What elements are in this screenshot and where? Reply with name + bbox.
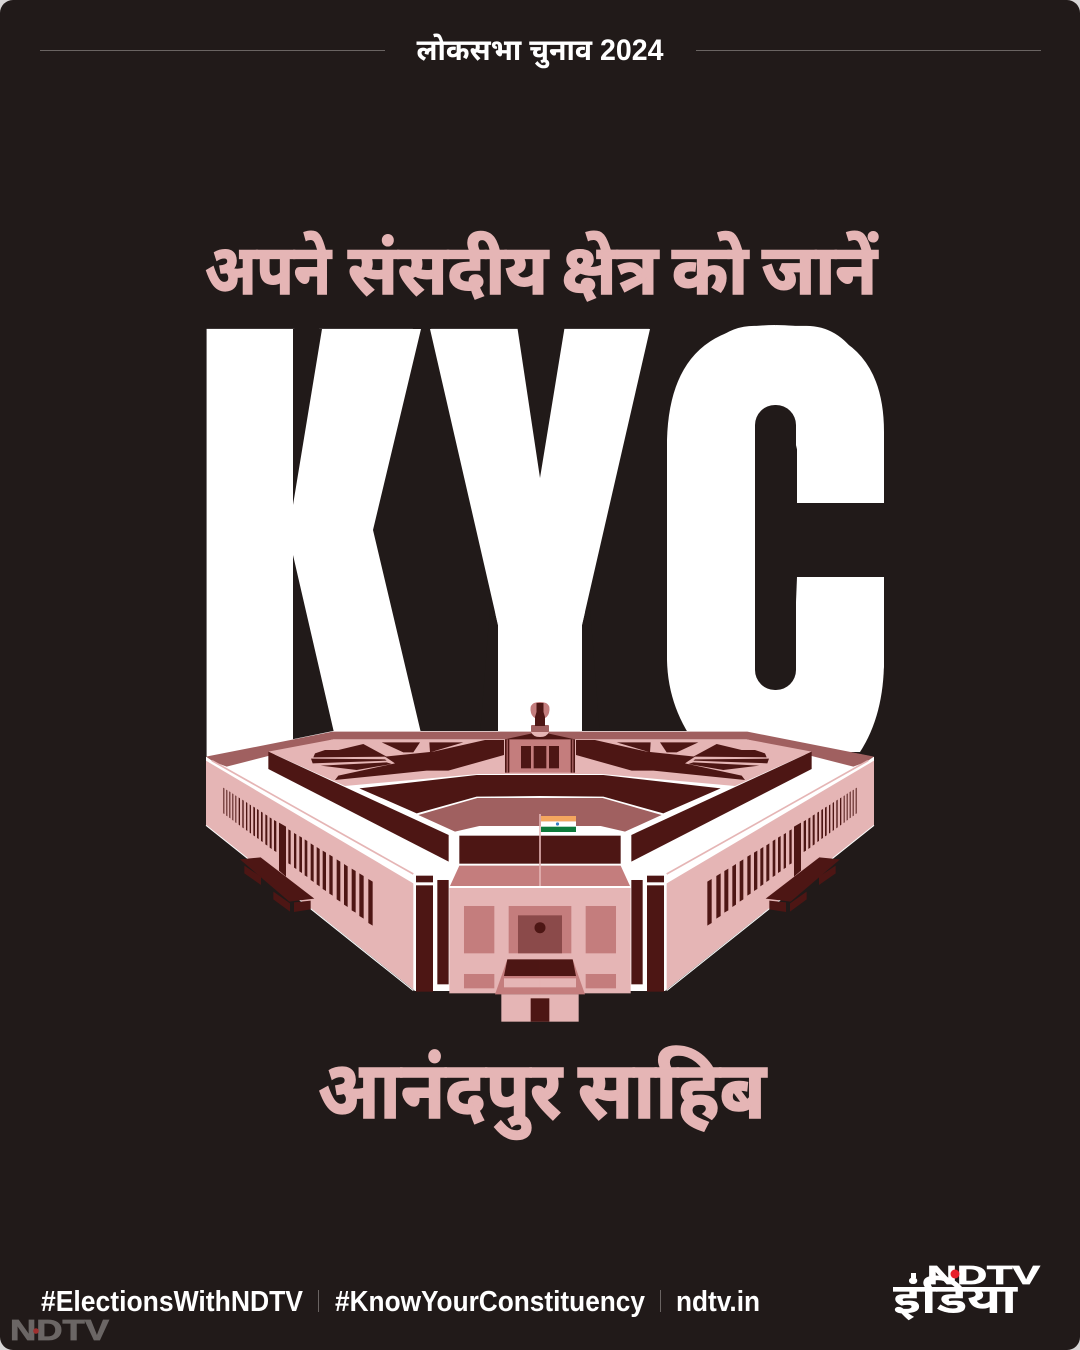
heading: know your constituency: अपने [205, 230, 333, 309]
building base terrace [206, 731, 874, 991]
side wall [206, 761, 413, 989]
footer hashtags: #KnowYourConstituency [335, 1286, 645, 1318]
logo: NDTV India: इंडिया [893, 1275, 1018, 1322]
flag pole [539, 814, 541, 886]
porch [501, 994, 540, 1022]
facade [449, 888, 540, 993]
rear block half [505, 739, 540, 773]
icon: indian flag [541, 816, 576, 832]
slanted dark wall [268, 752, 449, 862]
giant KYC lettering: C [681, 195, 869, 898]
center door knob [534, 922, 546, 933]
entrance steps [495, 959, 540, 994]
giant KYC lettering: K [216, 192, 395, 901]
portico roof [450, 866, 540, 886]
icon: national emblem [530, 702, 550, 737]
illustration: parliament building [206, 702, 874, 1022]
heading: know your constituency: को [672, 231, 749, 309]
facade panels [464, 906, 540, 988]
side steps [240, 857, 314, 912]
logo: NDTV India: NDTV [927, 1260, 1041, 1290]
Y stem [480, 595, 498, 735]
heading: know your constituency: संसदीय [348, 231, 549, 309]
header: election label: लोकसभा चुनाव 2024 [416, 33, 664, 69]
giant KYC lettering: Y [453, 191, 627, 900]
footer hashtags: ndtv.in [676, 1286, 760, 1318]
courtyard [359, 775, 540, 813]
Y notch [517, 325, 565, 478]
logo: NDTV India [893, 1260, 1041, 1322]
right wing [540, 732, 874, 1022]
C aperture [796, 503, 894, 577]
C edge trim [884, 380, 894, 720]
constituency name: साहिब [578, 1046, 767, 1135]
central door panel [518, 915, 540, 953]
roof rim [206, 732, 540, 767]
upper pink roof [268, 739, 540, 786]
footer hashtags [41, 1286, 760, 1318]
C counter [755, 405, 796, 690]
front dark band [459, 836, 540, 864]
wall windows [223, 788, 373, 926]
constituency name [318, 1046, 767, 1140]
heading: know your constituency [205, 230, 879, 309]
roof fan pattern [311, 740, 504, 780]
logo: NDTV watermark: NDTV [10, 1315, 110, 1347]
giant KYC lettering [216, 191, 894, 901]
constituency name: आनंदपुर [318, 1046, 564, 1140]
left wing [206, 732, 540, 1022]
footer hashtags: #ElectionsWithNDTV [41, 1286, 304, 1318]
K arm weight [335, 329, 425, 750]
corner columns [416, 876, 449, 992]
heading: know your constituency: जानें [762, 231, 879, 309]
heading: know your constituency: क्षेत्र [562, 230, 660, 309]
C body [775, 325, 884, 503]
